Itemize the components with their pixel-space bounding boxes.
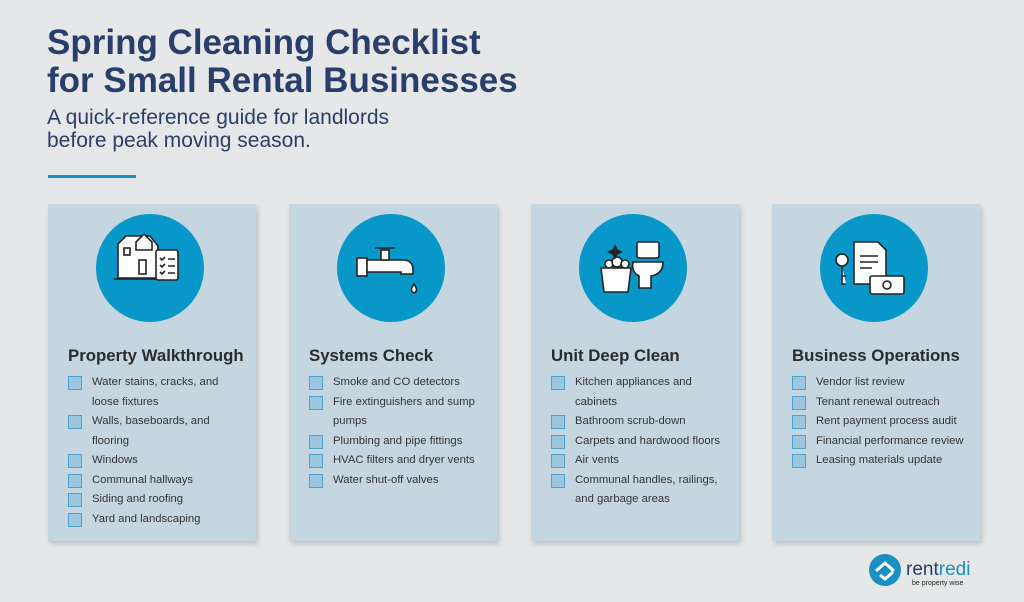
- icon: key, document, cash: [820, 214, 928, 322]
- checklist: Smoke and CO detectors: [333, 376, 460, 388]
- heading: Unit Deep Clean: [551, 346, 680, 365]
- heading: Systems Check: [309, 346, 433, 365]
- checklist: [551, 376, 720, 505]
- subtitle: A quick-reference guide for landlords: [47, 106, 389, 129]
- subtitle: before peak moving season.: [47, 129, 311, 152]
- panel: business operations: [772, 204, 980, 541]
- checklist: Windows: [92, 454, 138, 466]
- subtitle: [47, 106, 389, 152]
- icon: house with clipboard: [96, 214, 204, 322]
- checklist: Siding and roofing: [92, 493, 183, 505]
- checklist: Vendor list review: [816, 376, 905, 388]
- panel: unit deep clean: [531, 204, 739, 541]
- checklist: [68, 376, 218, 527]
- checklist: Water shut-off valves: [333, 474, 438, 486]
- checklist: Communal hallways: [92, 474, 193, 486]
- title: Spring Cleaning Checklist: [47, 23, 481, 62]
- checklist: Yard and landscaping: [92, 512, 200, 524]
- icon: toilet and bucket: [579, 214, 687, 322]
- checklist: Bathroom scrub-down: [575, 415, 686, 427]
- checklist: [309, 376, 475, 488]
- logo: rentredi: be property wise: [912, 580, 963, 587]
- checklist: Carpets and hardwood floors: [575, 434, 720, 446]
- checklist: Communal handles, railings,: [575, 474, 718, 486]
- checklist: loose fixtures: [92, 396, 159, 408]
- checklist: Rent payment process audit: [816, 415, 957, 427]
- checklist: Kitchen appliances and: [575, 376, 692, 388]
- checklist: flooring: [92, 434, 129, 446]
- icon: faucet: [337, 214, 445, 322]
- checklist: cabinets: [575, 396, 617, 408]
- checklist: Fire extinguishers and sump: [333, 396, 475, 408]
- logo: rentredi: rentredi: [906, 559, 970, 580]
- panel: systems check: [289, 204, 497, 541]
- heading: Property Walkthrough: [68, 346, 244, 365]
- checklist: Plumbing and pipe fittings: [333, 434, 462, 446]
- checklist: Walls, baseboards, and: [92, 415, 210, 427]
- checklist: Tenant renewal outreach: [816, 396, 940, 408]
- checklist: Financial performance review: [816, 434, 964, 446]
- title: [47, 23, 518, 100]
- checklist: and garbage areas: [575, 493, 670, 505]
- checklist: Air vents: [575, 454, 619, 466]
- checklist: HVAC filters and dryer vents: [333, 454, 475, 466]
- logo: rentredi: [869, 554, 970, 587]
- checklist: pumps: [333, 415, 367, 427]
- checklist: Leasing materials update: [816, 454, 942, 466]
- title: for Small Rental Businesses: [47, 61, 518, 100]
- checklist: [792, 376, 964, 468]
- heading: Business Operations: [792, 346, 960, 365]
- panel: property walkthrough: [48, 204, 256, 541]
- checklist: Water stains, cracks, and: [92, 376, 218, 388]
